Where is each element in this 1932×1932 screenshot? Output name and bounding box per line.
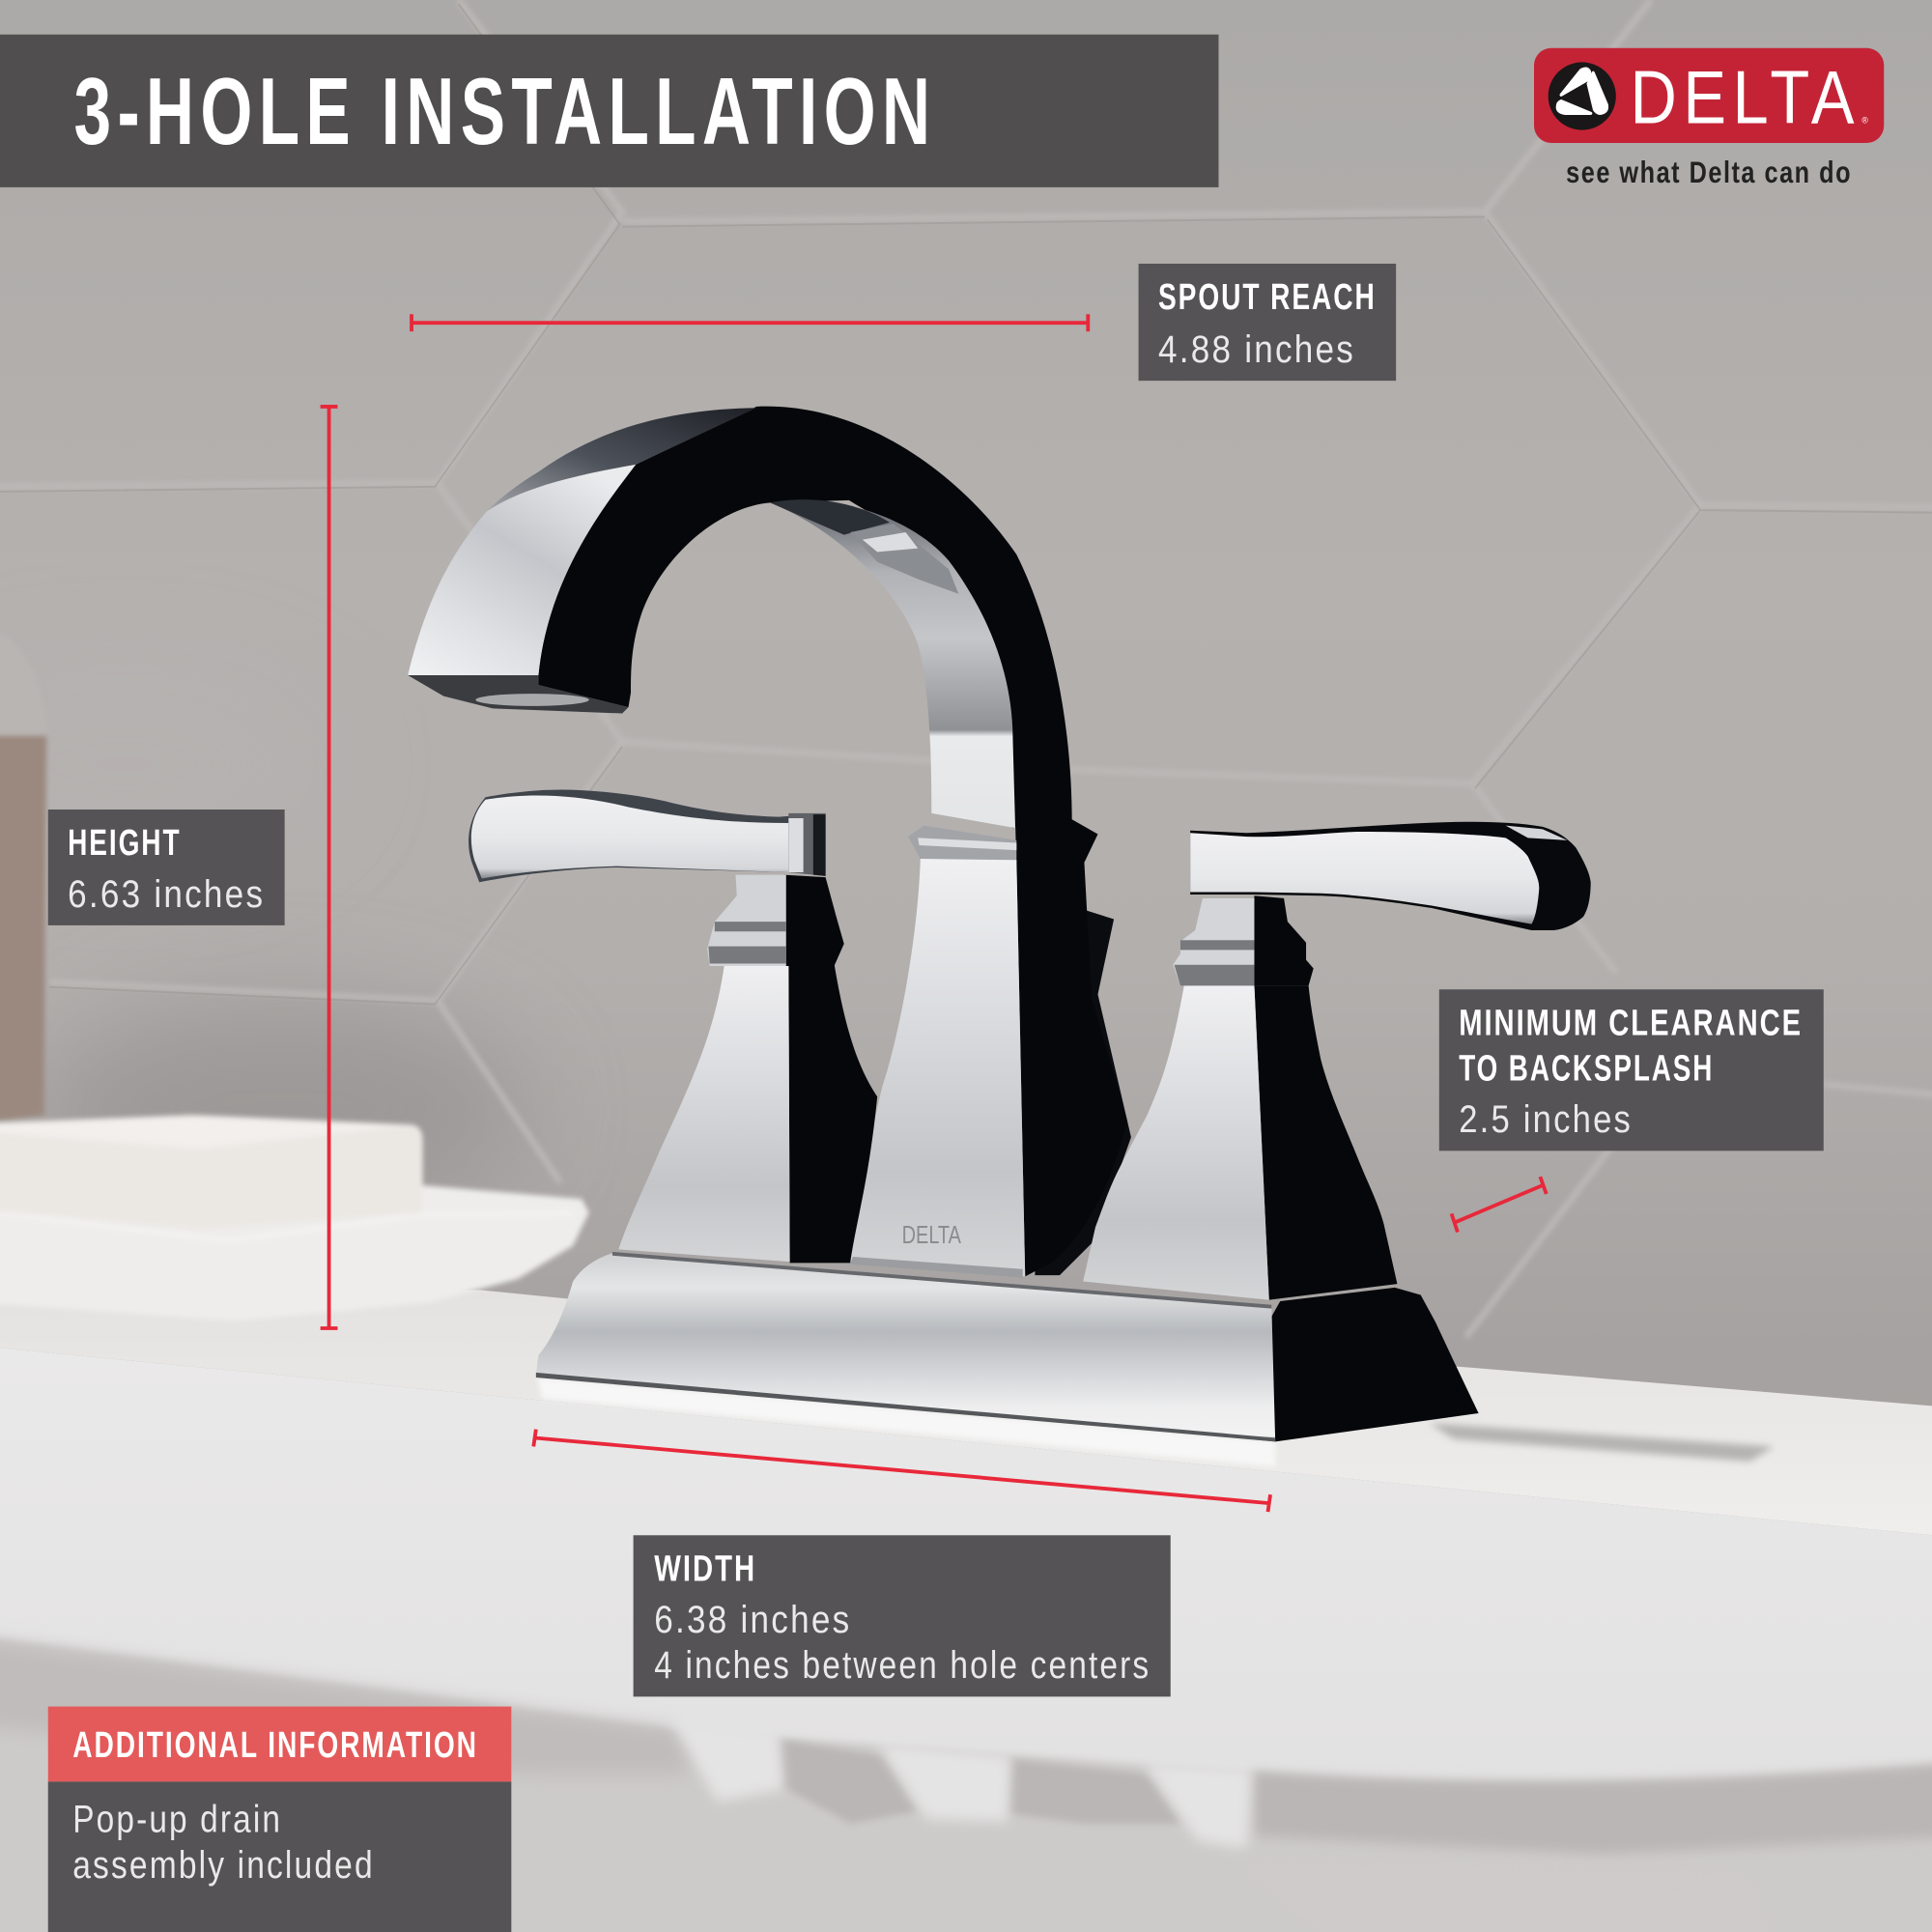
bottle on the left [0, 626, 49, 1123]
text: pop-up drain: Pop-up drain [72, 1798, 282, 1841]
Delta logo: DELTA [1631, 57, 1861, 140]
left handle [469, 789, 877, 1263]
counter top [0, 1288, 1932, 1535]
label: spout reach: SPOUT REACH [1158, 276, 1377, 317]
dimension line: width [533, 1430, 1270, 1512]
central collar [908, 819, 1097, 870]
spout chrome inner band [770, 500, 1015, 828]
white reflections of faucet feet [671, 1719, 1252, 1848]
label: minimum clearance to backsplash [1439, 989, 1824, 1151]
title banner: 3-HOLE INSTALLATION [74, 58, 936, 164]
reflection zone on the counter front [0, 1634, 1932, 1932]
soap and tray [0, 1115, 589, 1321]
dimension line: spout reach [412, 314, 1088, 331]
text: pop-up drain [48, 1781, 511, 1932]
right handle [1083, 822, 1591, 1300]
label: width: WIDTH [654, 1548, 756, 1588]
dimension line: height [321, 407, 337, 1328]
spout chrome front [408, 465, 636, 675]
label: height: HEIGHT [68, 822, 182, 863]
dimension line: minimum clearance [1452, 1177, 1547, 1233]
wall tile grout lines [0, 0, 1932, 1337]
heading: additional information [48, 1707, 511, 1781]
Delta logo [1534, 48, 1884, 189]
Delta logo: ® [1861, 116, 1868, 126]
title banner [0, 35, 1218, 187]
nozzle [408, 675, 629, 714]
faucet [408, 407, 1591, 1441]
text: pop-up drain: assembly included [72, 1843, 375, 1887]
label: height: 6.63 inches [68, 872, 265, 916]
icon: delta triangle mark [1548, 62, 1616, 130]
label: width: 6.38 inches [654, 1598, 851, 1641]
counter shadow [1430, 1423, 1775, 1462]
white reflection under base [537, 1378, 1275, 1466]
counter front [0, 1348, 1932, 1932]
label: height [48, 810, 285, 925]
label: minimum clearance to backsplash: TO BACKSPLASH [1459, 1048, 1714, 1089]
rear handle peek [1035, 911, 1131, 1275]
label: spout reach: 4.88 inches [1158, 327, 1355, 371]
Delta logo: see what Delta can do [1566, 155, 1852, 189]
spout dark top strip [487, 408, 756, 511]
panel: additional information [48, 1707, 511, 1932]
faucet base [536, 1252, 1479, 1441]
logo on faucet: DELTA [902, 1222, 961, 1249]
spout black arch [538, 407, 1072, 828]
label: width [634, 1535, 1171, 1696]
heading: additional information: ADDITIONAL INFORMATION [72, 1724, 478, 1765]
central body [850, 859, 1127, 1278]
label: spout reach [1139, 264, 1396, 381]
label: minimum clearance to backsplash: 2.5 inches [1459, 1097, 1633, 1141]
label: width: 4 inches between hole centers [654, 1643, 1151, 1687]
label: minimum clearance to backsplash: MINIMUM CLEARANCE [1459, 1002, 1803, 1042]
